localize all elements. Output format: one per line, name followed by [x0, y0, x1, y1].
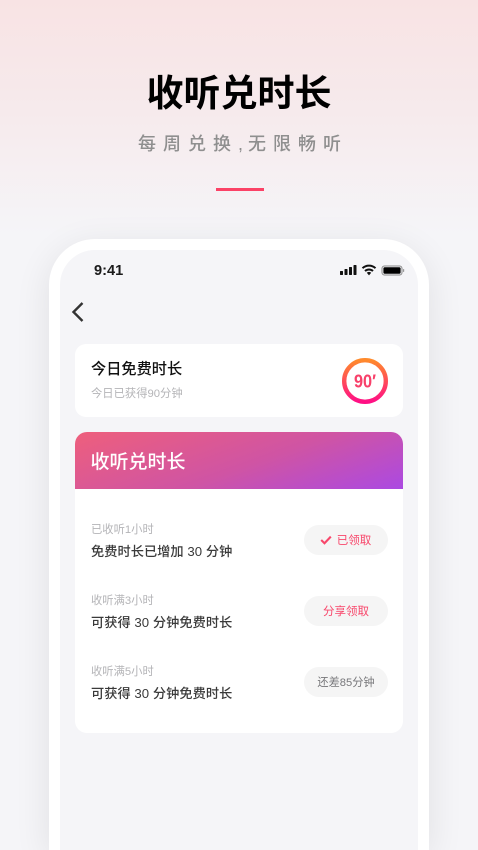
panel: today's free time	[75, 344, 403, 417]
row 3 button: remaining time	[304, 667, 388, 697]
row 1 button: claimed	[304, 525, 388, 555]
row 1 button: claimed: 已领取	[337, 535, 371, 547]
today subtext: 今日已获得90分钟	[91, 388, 183, 400]
row 2 text: 可获得 30 分钟免费时长	[91, 615, 232, 630]
row 2 button: share to claim	[304, 596, 388, 626]
status bar time: 9:41	[94, 263, 123, 279]
subtitle: 每周兑换,无限畅听	[138, 134, 348, 154]
row 2 label: 收听满3小时	[91, 595, 154, 607]
phone screen	[60, 250, 418, 850]
panel: listening exchange	[75, 432, 403, 733]
row 3 label: 收听满5小时	[91, 666, 154, 678]
status icons	[340, 264, 404, 276]
title: 收听兑时长	[146, 73, 332, 114]
row 3 text: 可获得 30 分钟免费时长	[91, 686, 232, 701]
row 1 text: 免费时长已增加 30 分钟	[91, 544, 232, 559]
panel heading: 收听兑时长	[90, 452, 186, 473]
today heading: 今日免费时长	[91, 361, 182, 378]
ring badge 90 minutes	[342, 358, 388, 404]
accent line	[216, 188, 264, 191]
ring badge 90 minutes: 90′	[354, 371, 376, 391]
panel header	[75, 432, 403, 489]
row 3 button: remaining time: 还差85分钟	[317, 677, 375, 689]
back arrow	[72, 302, 84, 322]
row 1 label: 已收听1小时	[91, 524, 154, 536]
phone frame	[49, 239, 429, 850]
row 2 button: share to claim: 分享领取	[323, 606, 369, 618]
